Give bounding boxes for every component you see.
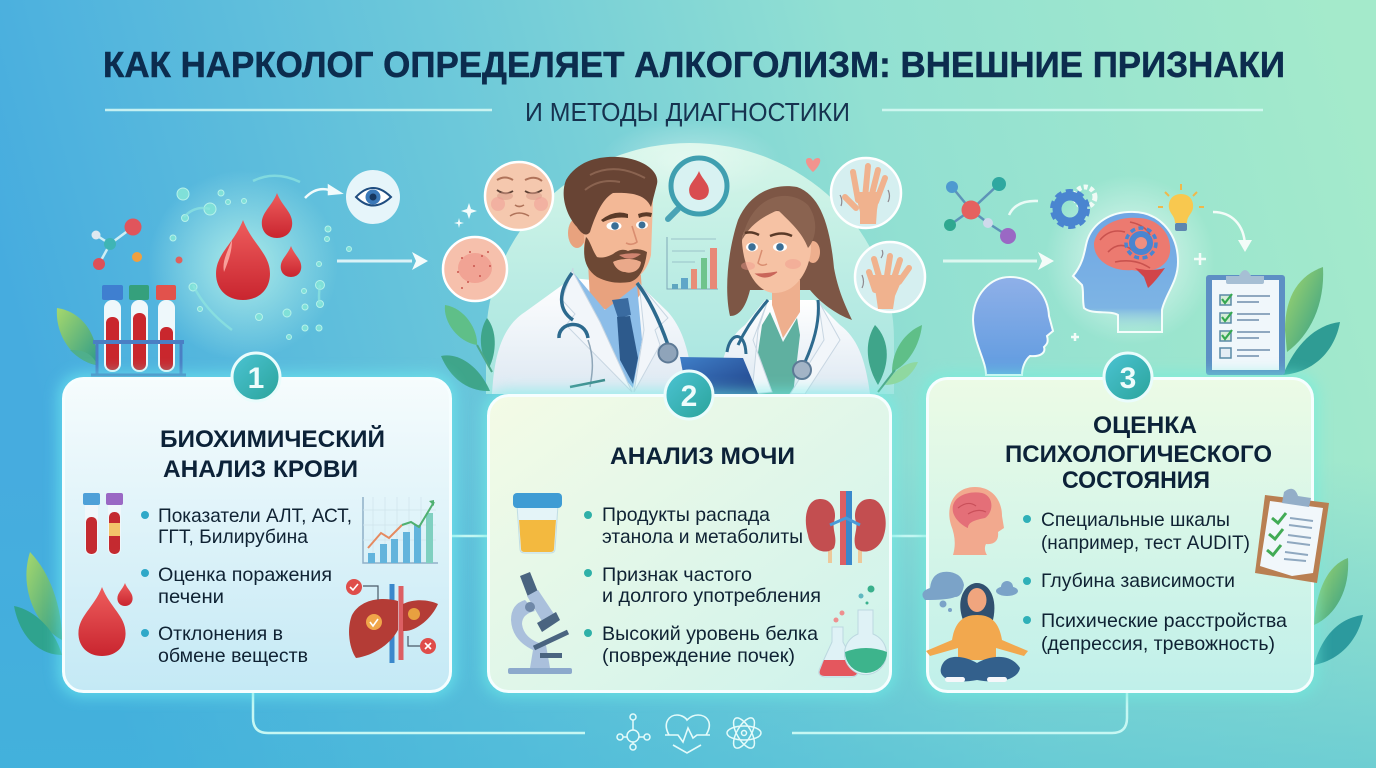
illustration: blood analysis [57, 170, 428, 375]
icon: leaves bottom left [14, 552, 62, 655]
icon: molecule right [944, 177, 1016, 244]
icon: meditating woman [926, 583, 1028, 682]
illustration: doctors [441, 120, 925, 394]
glow behind drops [148, 170, 338, 360]
panel: psychological state [922, 353, 1329, 697]
arrow: to head [943, 252, 1054, 270]
chart: rising bars [363, 497, 438, 563]
icon: blood drops [78, 583, 133, 656]
icon: two tubes [83, 493, 123, 555]
panel: blood test [58, 353, 456, 697]
bullet list: Психические расстройства [1041, 610, 1287, 632]
icon: microscope [508, 572, 572, 674]
heading [160, 425, 385, 483]
icon: leaves left [57, 308, 97, 365]
card box [488, 396, 890, 692]
bullet list: Оценка поражения [158, 564, 332, 586]
badge 2 [665, 371, 713, 419]
icon: eye [346, 170, 400, 224]
icon: bottom atom [727, 715, 761, 751]
bullet list: обмене веществ [158, 645, 308, 667]
badge 3 [1104, 353, 1152, 401]
bullet list: (повреждение почек) [602, 645, 795, 667]
card glow [58, 373, 456, 697]
badge 3: 3 [1120, 362, 1136, 395]
bullet list: и долгого употребления [602, 585, 821, 607]
icon: flasks [819, 586, 887, 677]
bullet list: печени [158, 586, 224, 608]
card box [64, 378, 450, 692]
icon: bottom molecule [617, 714, 650, 750]
icon: heart [806, 158, 820, 172]
bullet list: Высокий уровень белка [602, 623, 818, 645]
icon: leaves clipboard [1283, 267, 1340, 375]
icon: leaves beside doctors left [441, 305, 495, 391]
arrow: curved to clipboard [1213, 212, 1252, 252]
bullet list: Признак частого [602, 564, 752, 586]
icon: molecule left [92, 218, 182, 270]
icon: test tubes in rack [91, 285, 186, 375]
orbit of particles [170, 188, 352, 340]
badge 1 [232, 353, 280, 401]
man doctor [492, 157, 694, 394]
dome background [486, 143, 894, 394]
card glow [483, 390, 896, 697]
icon: bottom heart pulse [665, 715, 710, 753]
icon: gears [1052, 187, 1095, 227]
bullet list: (например, тест AUDIT) [1041, 532, 1250, 554]
arrow: curved stroke [1009, 201, 1038, 215]
heading: АНАЛИЗ МОЧИ [610, 443, 795, 470]
icon: sparkles [454, 203, 477, 228]
card glow [922, 373, 1318, 697]
icon: skin rash circle [443, 237, 507, 301]
icon: clipboard tilted [1255, 489, 1329, 583]
arrow: curved to eye [305, 186, 340, 198]
icon: small blood drop [281, 246, 301, 277]
icon: thought clouds [922, 572, 1018, 612]
icon: hand circle bottom [855, 242, 925, 312]
bullet list: Продукты распада [602, 504, 770, 526]
icon: leaves bottom right [1314, 558, 1363, 665]
connector lines [253, 536, 1127, 733]
heading: БИОХИМИЧЕСКИЙ [160, 425, 385, 453]
heading: ОЦЕНКА [1093, 412, 1197, 439]
bullet list: Показатели АЛТ, АСТ, [158, 505, 352, 527]
heading: СОСТОЯНИЯ [1062, 467, 1210, 494]
badge 1: 1 [248, 362, 264, 395]
icon: centre head with brain [1073, 212, 1178, 332]
heading [1005, 412, 1272, 494]
bullet list [1023, 509, 1287, 655]
panel: urine test [483, 371, 896, 697]
bullet list: ГГТ, Билирубина [158, 526, 308, 548]
badge 2: 2 [681, 380, 697, 413]
bullet list: Отклонения в [158, 623, 283, 645]
illustration: psychology [943, 175, 1340, 375]
subtitle: И МЕТОДЫ ДИАГНОСТИКИ [525, 97, 850, 127]
icon: leaves beside doctors right [868, 325, 922, 392]
icon: head with brain [949, 487, 1004, 555]
sparkles [1071, 253, 1206, 341]
icon: kidneys [806, 491, 886, 565]
arrow: blood to doctors [337, 252, 428, 270]
icon: medium blood drop [262, 193, 292, 238]
icon: tired face circle [485, 162, 553, 230]
icon: clipboard checklist [1206, 270, 1285, 375]
chart: doctors bars [667, 237, 718, 289]
icon: liver [346, 579, 438, 663]
bullet list [141, 505, 352, 667]
card box [928, 378, 1312, 692]
bullet list: Глубина зависимости [1041, 570, 1235, 592]
heading: АНАЛИЗ КРОВИ [163, 456, 358, 483]
bullet list: этанола и метаболиты [602, 526, 803, 548]
bullet list [584, 504, 821, 667]
glow behind head [1045, 175, 1215, 345]
bullet list: (депрессия, тревожность) [1041, 633, 1275, 655]
icon: light bulb [1158, 184, 1204, 231]
heading: ПСИХОЛОГИЧЕСКОГО [1005, 441, 1272, 468]
icon: urine cup [513, 493, 562, 553]
icon: large blood drop [216, 220, 270, 300]
icon: clipboard held [680, 357, 758, 394]
woman doctor [718, 186, 870, 394]
icon: magnifier with drop [668, 158, 727, 219]
glow top [600, 120, 780, 200]
bullet list: Специальные шкалы [1041, 509, 1230, 531]
title: КАК НАРКОЛОГ ОПРЕДЕЛЯЕТ АЛКОГОЛИЗМ: ВНЕШНИЕ ПРИЗНАКИ [103, 44, 1285, 85]
icon: side head [973, 277, 1053, 375]
icon: hand circle top [831, 158, 901, 228]
